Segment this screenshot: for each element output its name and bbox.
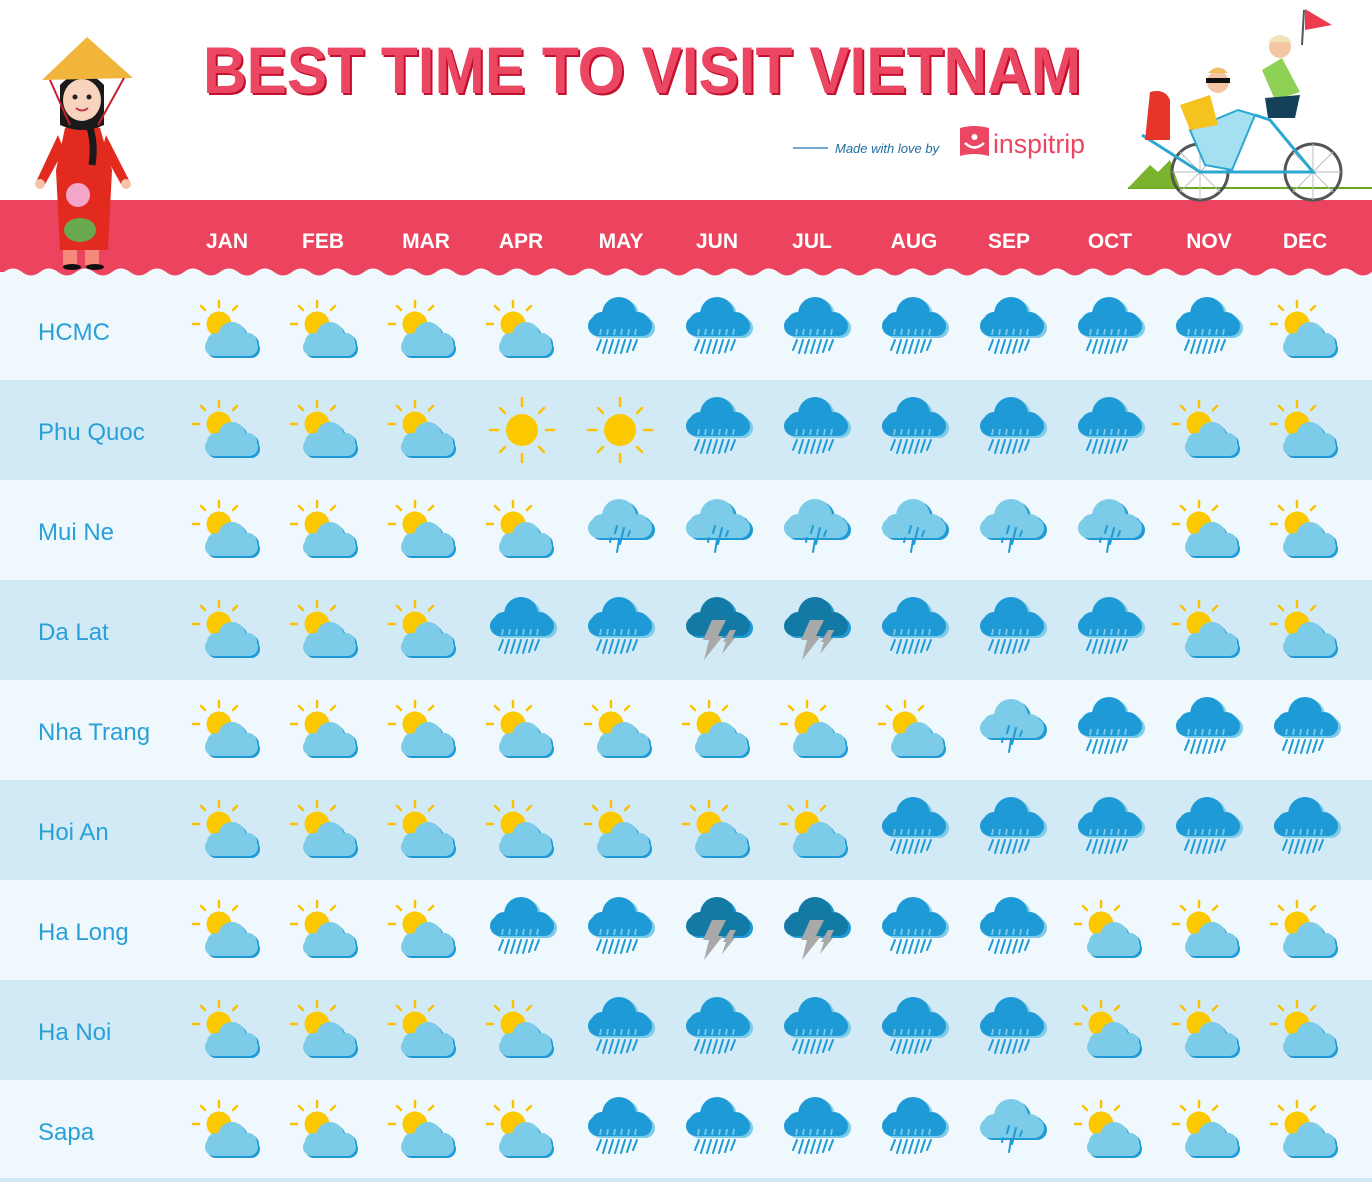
month header band: DEC xyxy=(1283,230,1327,253)
illustration: vietnamese woman xyxy=(35,37,133,270)
logo icon xyxy=(960,126,989,156)
row labels: HCMC xyxy=(38,319,110,346)
row labels: Da Lat xyxy=(38,619,109,646)
row: Da Lat weather icons xyxy=(193,597,1338,660)
row labels: Sapa xyxy=(38,1119,95,1146)
month header band: AUG xyxy=(891,230,937,253)
row labels: Nha Trang xyxy=(38,719,150,746)
month header band: SEP xyxy=(988,230,1030,253)
credit: made with love by inspitrip: inspitrip xyxy=(993,129,1085,159)
month header band: MAY xyxy=(599,230,643,253)
month header band: NOV xyxy=(1186,230,1232,253)
month header band: JAN xyxy=(206,230,248,253)
row: Phu Quoc weather icons xyxy=(193,397,1338,462)
table rows background xyxy=(0,270,1372,1182)
row labels: Hoi An xyxy=(38,819,109,846)
illustration: cyclo ride xyxy=(1128,9,1372,200)
row: Hoi An weather icons xyxy=(193,797,1341,858)
month header band xyxy=(0,200,1372,276)
credit: made with love by inspitrip xyxy=(793,126,1085,159)
credit: made with love by inspitrip: Made with love by xyxy=(835,141,941,156)
month header band: JUL xyxy=(792,230,832,253)
row: Sapa weather icons xyxy=(193,1097,1338,1158)
row labels: Ha Noi xyxy=(38,1019,111,1046)
row: Ha Noi weather icons xyxy=(193,997,1338,1058)
row labels: Mui Ne xyxy=(38,519,114,546)
month header band: OCT xyxy=(1088,230,1132,253)
month header band: FEB xyxy=(302,230,344,253)
row labels xyxy=(38,319,150,1146)
month header band: APR xyxy=(499,230,543,253)
row: Nha Trang weather icons xyxy=(193,697,1341,758)
title: BEST TIME TO VISIT VIETNAM xyxy=(205,35,1083,109)
row: Mui Ne weather icons xyxy=(193,499,1338,558)
row: HCMC weather icons xyxy=(193,297,1338,358)
row: Ha Long weather icons xyxy=(193,897,1338,960)
month header band: JUN xyxy=(696,230,738,253)
month header band: MAR xyxy=(402,230,450,253)
row labels: Phu Quoc xyxy=(38,419,145,446)
row labels: Ha Long xyxy=(38,919,129,946)
title: BEST TIME TO VISIT VIETNAM xyxy=(203,33,1081,107)
